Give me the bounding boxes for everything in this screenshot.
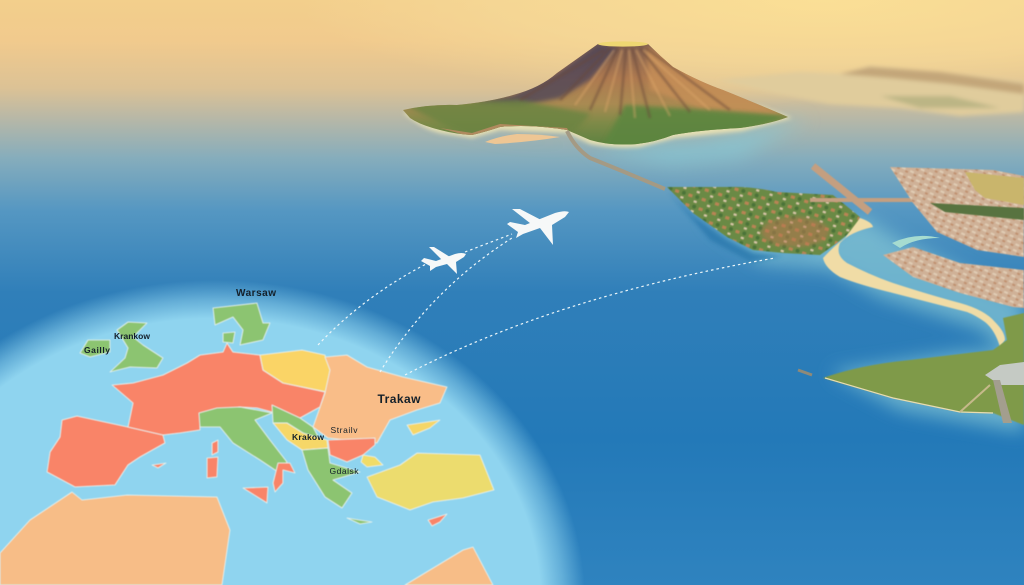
island shore foam — [403, 106, 792, 148]
label: Strailv: Strailv — [330, 425, 358, 435]
thrace — [361, 455, 383, 467]
sardinia — [207, 457, 218, 478]
pier and bridge — [810, 166, 1000, 212]
label: Warsaw: Warsaw — [236, 288, 276, 299]
volcano shadow flank — [470, 44, 618, 106]
bulgaria — [328, 438, 375, 462]
label: Krankow north: Krankow — [114, 331, 150, 341]
crete — [347, 518, 372, 524]
france and germany — [112, 343, 325, 435]
italy — [199, 407, 287, 472]
tree band — [930, 203, 1024, 220]
icon: large airplane — [507, 209, 569, 245]
cyprus — [428, 514, 447, 526]
north africa — [0, 492, 230, 585]
label: Trakaw: Trakaw — [378, 392, 421, 406]
denmark — [223, 332, 235, 343]
causeway — [567, 131, 665, 189]
poland — [260, 350, 330, 392]
southern green headland — [798, 313, 1024, 425]
peninsula shoreline shadow — [667, 190, 783, 262]
label: Gailly: Gailly — [84, 345, 110, 355]
greece — [302, 448, 360, 508]
europe map — [0, 303, 494, 585]
great britain — [110, 322, 163, 372]
turkey — [367, 453, 494, 510]
balkans yellow — [273, 423, 328, 450]
balkans green — [272, 405, 320, 440]
pale blue map halo — [0, 270, 600, 585]
calabria — [273, 463, 295, 492]
sand beach — [485, 134, 560, 144]
corsica — [212, 440, 218, 455]
ukraine and romania — [313, 355, 447, 443]
middle east land — [405, 547, 493, 585]
shallow water halo around islands — [403, 118, 1024, 432]
spain — [47, 416, 165, 487]
city district south — [883, 247, 1024, 308]
crater rim — [598, 41, 648, 47]
volcano sunlit flank — [646, 46, 788, 117]
scandinavia — [213, 303, 270, 345]
green lower slopes — [403, 100, 590, 138]
ireland — [80, 340, 110, 357]
far coast on horizon — [718, 66, 1024, 116]
sand spit — [823, 218, 1005, 347]
crimea — [407, 420, 440, 435]
lagoon sandbar — [892, 236, 940, 248]
country labels — [84, 288, 421, 476]
label: Gdalsk: Gdalsk — [330, 466, 359, 476]
cliffs — [440, 124, 568, 135]
dotted flight paths — [318, 234, 775, 375]
balearic islands — [152, 463, 166, 468]
label: Krakow south: Krakow — [292, 432, 324, 442]
icon: small airplane — [421, 247, 466, 274]
peninsula town — [667, 187, 860, 262]
sicily — [243, 487, 268, 503]
city district north — [890, 167, 1024, 257]
park in city — [965, 172, 1024, 205]
volcano island — [400, 40, 800, 189]
